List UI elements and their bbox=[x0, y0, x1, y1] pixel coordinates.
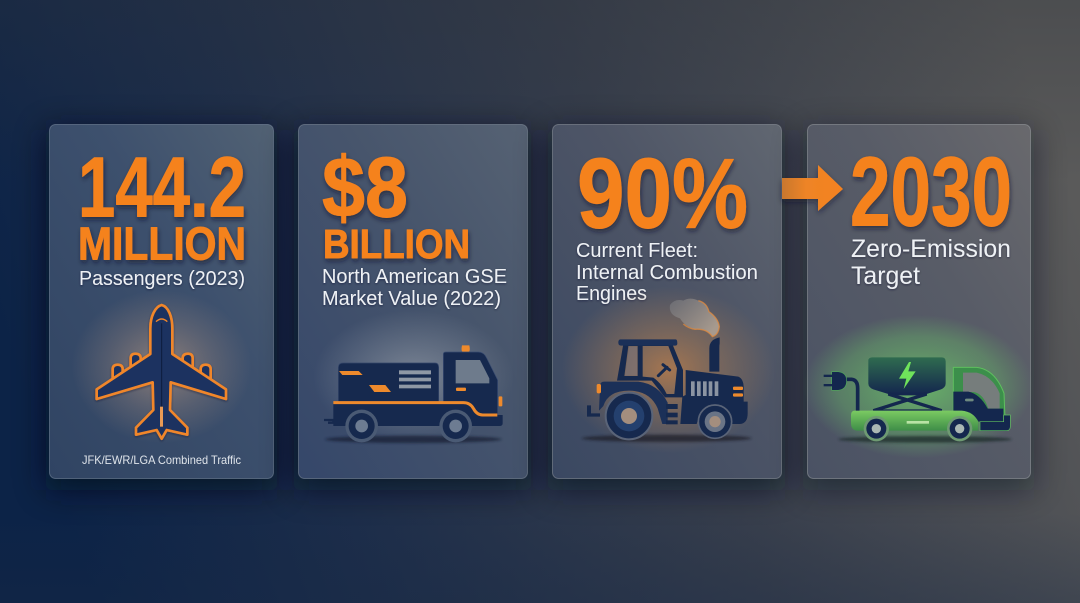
panel: zero-emission target bbox=[803, 124, 1034, 490]
smoke bbox=[670, 299, 719, 337]
plug bbox=[824, 372, 858, 411]
panel: market value bbox=[294, 124, 531, 490]
label: zero-emission target: Zero-Emission bbox=[851, 235, 1011, 263]
stat unit: million: MILLION bbox=[78, 218, 246, 270]
stat: $8: $8 bbox=[322, 140, 408, 236]
label: current fleet: Internal Combustion bbox=[576, 261, 758, 284]
stat unit: billion: BILLION bbox=[323, 221, 470, 267]
panel: passengers bbox=[46, 124, 277, 490]
label: passengers: Passengers (2023) bbox=[79, 268, 245, 290]
label: current fleet: Current Fleet: bbox=[576, 239, 698, 262]
arrow: 90% to 2030 bbox=[782, 165, 843, 211]
icon: airplane bbox=[72, 290, 252, 443]
stat: 90%: 90% bbox=[577, 138, 748, 248]
label: market value: North American GSE bbox=[322, 265, 507, 288]
stat: 144.2: 144.2 bbox=[78, 140, 246, 236]
label: market value: Market Value (2022) bbox=[322, 287, 501, 310]
icon: service truck bbox=[313, 310, 513, 443]
icon: diesel tractor bbox=[562, 287, 775, 453]
icon: electric lift truck bbox=[803, 315, 1033, 458]
label: current fleet: Engines bbox=[576, 282, 647, 305]
label: zero-emission target bbox=[851, 235, 1011, 290]
label: current fleet bbox=[576, 239, 758, 305]
label: zero-emission target: Target bbox=[851, 262, 920, 290]
footnote: combined traffic: JFK/EWR/LGA Combined Traffic bbox=[82, 453, 241, 467]
label: market value bbox=[322, 265, 507, 310]
panel: current fleet bbox=[548, 124, 785, 490]
stat: 2030: 2030 bbox=[850, 136, 1012, 246]
